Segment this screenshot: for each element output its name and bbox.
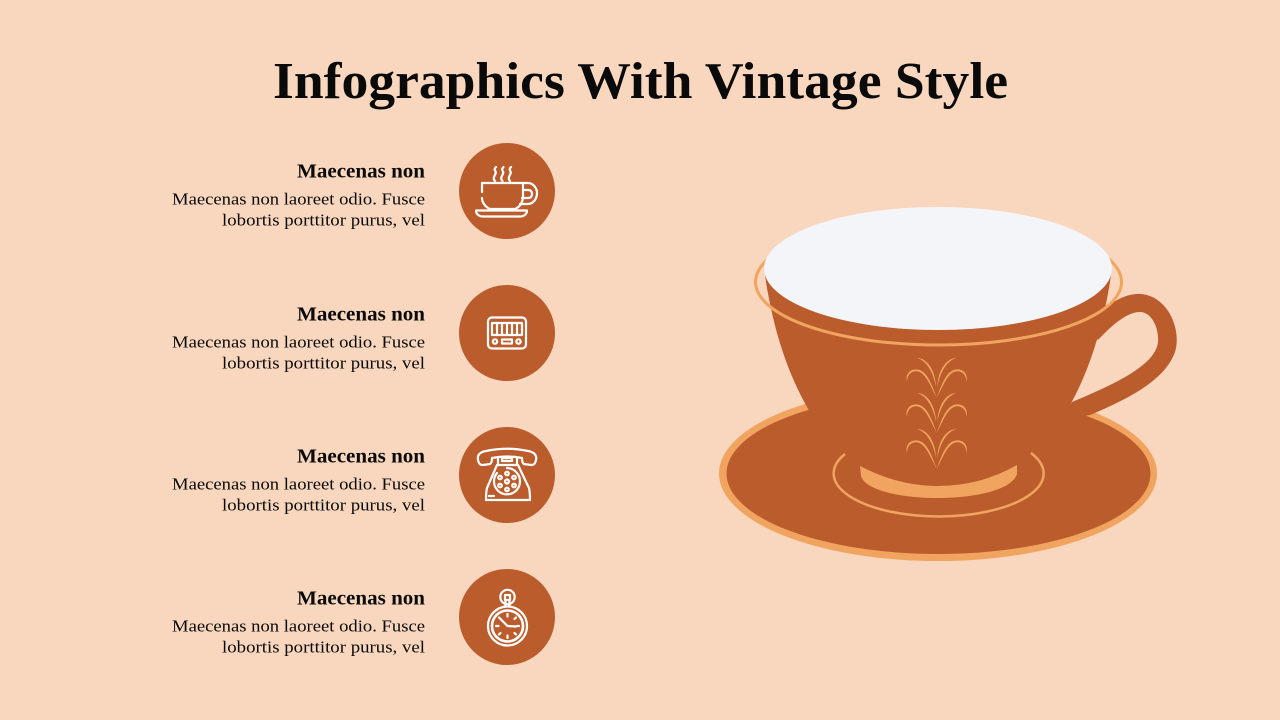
leaf tier 3 <box>907 429 967 469</box>
icon: pocket watch <box>459 569 555 665</box>
leaf tier 2 <box>907 393 967 433</box>
item 3 heading: Maecenas non <box>297 446 425 468</box>
icon: rotary telephone <box>459 427 555 523</box>
item 1 body text <box>172 190 425 230</box>
icon: radio <box>459 285 555 381</box>
cup lip ring <box>756 219 1122 345</box>
leaf tier 1 <box>907 358 967 398</box>
cup foot crescent <box>860 465 1017 498</box>
leaf ornament <box>907 358 967 469</box>
item 3 body text: lobortis porttitor purus, vel <box>222 496 425 514</box>
saucer <box>719 386 1157 561</box>
item 1 body text: Maecenas non laoreet odio. Fusce <box>172 190 425 208</box>
item 3 body text <box>172 474 425 514</box>
saucer inner ring <box>834 453 1044 516</box>
cup handle <box>1060 294 1177 420</box>
item 3 body text: Maecenas non laoreet odio. Fusce <box>172 474 425 494</box>
item 4 body text: Maecenas non laoreet odio. Fusce <box>172 616 425 636</box>
item 2 body text: Maecenas non laoreet odio. Fusce <box>172 332 425 352</box>
title: Infographics With Vintage Style <box>273 53 1008 110</box>
illustration: vintage teacup on saucer <box>719 207 1177 561</box>
item 3: text and telephone icon <box>172 427 555 523</box>
item 4 body text <box>172 616 425 656</box>
item 4 body text: lobortis porttitor purus, vel <box>222 638 425 656</box>
item 1 body text: lobortis porttitor purus, vel <box>222 210 425 230</box>
cup body <box>764 268 1112 445</box>
item 2 body text <box>172 332 425 372</box>
item 2: text and radio icon <box>172 285 555 381</box>
icon: coffee cup <box>459 143 555 239</box>
item 2 heading: Maecenas non <box>297 304 425 326</box>
cup opening <box>764 207 1112 330</box>
item 1: text and coffee icon <box>172 143 555 239</box>
item 1 heading: Maecenas non <box>297 160 425 182</box>
item 4 heading: Maecenas non <box>297 588 425 610</box>
item 2 body text: lobortis porttitor purus, vel <box>222 354 425 372</box>
item 4: text and pocket watch icon <box>172 569 555 665</box>
